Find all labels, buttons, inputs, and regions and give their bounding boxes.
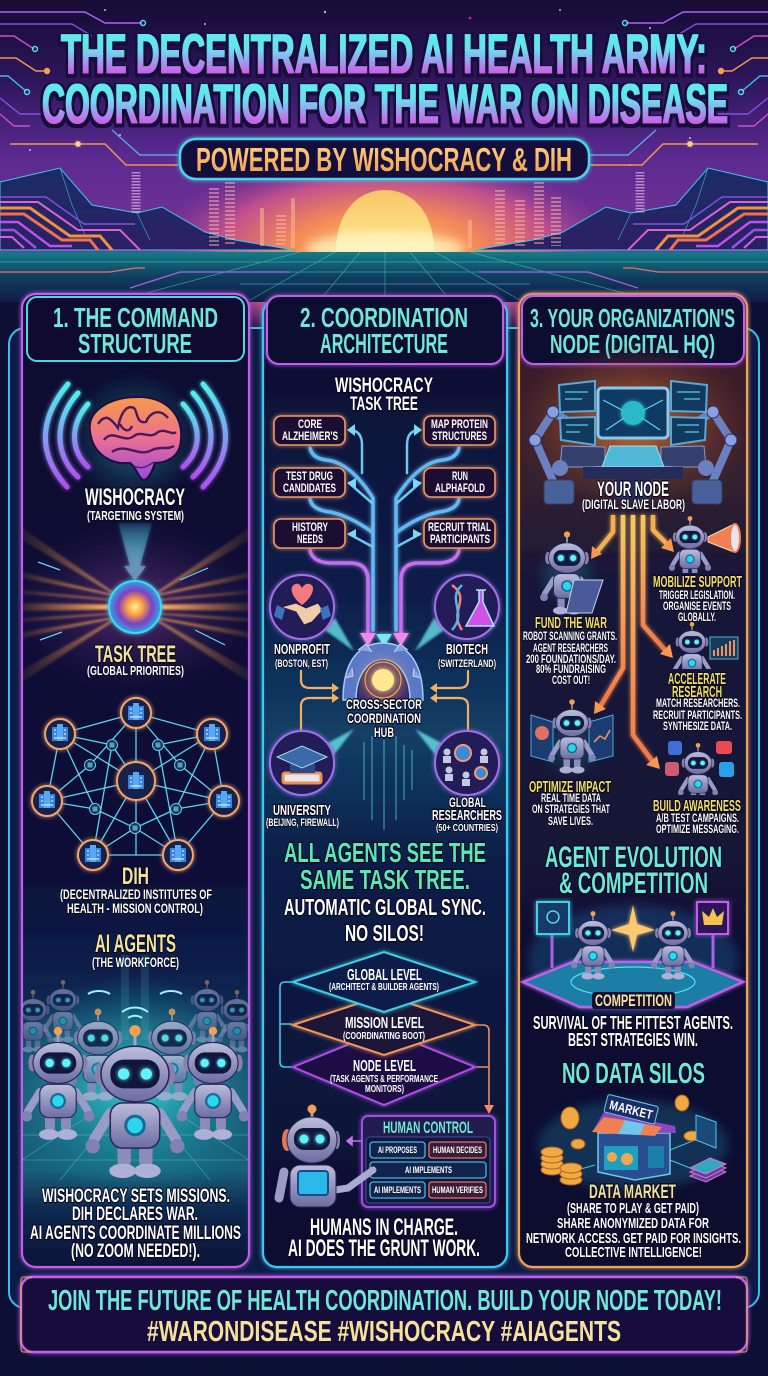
task tree starburst [22, 529, 249, 681]
human control box: HUMAN VERIFIES [432, 1185, 483, 1196]
tree label [335, 374, 433, 415]
footer call to action [21, 1277, 747, 1352]
panel 3 heading [522, 296, 744, 364]
optimize impact text: REAL TIME DATA [541, 793, 601, 805]
tree label: WISHOCRACY [335, 374, 433, 397]
task box: run alphafold: ALPHAFOLD [435, 481, 485, 495]
level text: (ARCHITECT & BUILDER AGENTS) [329, 982, 439, 993]
researchers label: GLOBAL [449, 794, 486, 810]
task box: test drug candidates: TEST DRUG [286, 469, 333, 483]
panel 1: command structure [0, 294, 285, 1267]
task tree label: (GLOBAL PRIORITIES) [87, 663, 184, 678]
floor [0, 252, 768, 302]
panel 1 heading: 1. THE COMMAND [53, 302, 218, 333]
panel 1 summary: AI AGENTS COORDINATE MILLIONS [30, 1222, 241, 1244]
level hierarchy diagram [280, 952, 494, 1114]
level text [329, 967, 439, 1095]
data streaks [364, 736, 412, 830]
panel 2 heading: 2. COORDINATION [300, 302, 468, 333]
level text: GLOBAL LEVEL [347, 967, 422, 984]
dih label: (DECENTRALIZED INSTITUTES OF [60, 886, 212, 902]
nonprofit label [274, 641, 330, 670]
task box: core alzheimer's [274, 416, 345, 445]
competition label [592, 991, 675, 1010]
icon: university [270, 731, 334, 795]
human control box: HUMAN CONTROL [383, 1118, 473, 1137]
optimize impact text: OPTIMIZE IMPACT [529, 779, 611, 796]
global level [293, 952, 475, 1012]
level text: (TASK AGENTS & PERFORMANCE [330, 1074, 438, 1085]
optimize impact text: ON STRATEGIES THAT [532, 804, 610, 816]
icon: control robot [279, 1104, 373, 1207]
competition text [533, 1013, 733, 1050]
title [42, 22, 728, 135]
nonprofit label: (BOSTON, EST) [275, 658, 328, 670]
arrow from human control to robot [347, 1137, 362, 1145]
arrow to human control [484, 1105, 494, 1114]
dih label: HEALTH - MISSION CONTROL) [67, 900, 203, 916]
task box: test drug candidates [274, 468, 345, 497]
node output arrows [591, 515, 674, 769]
branch arrowheads [347, 424, 422, 646]
task tree label [87, 641, 184, 678]
panel 1 summary: DIH DECLARES WAR. [72, 1203, 198, 1225]
arrow [118, 523, 152, 581]
circuit lines [0, 12, 178, 250]
coordination hub: COORDINATION [347, 710, 421, 726]
task box: core alzheimer's: ALZHEIMER'S [282, 429, 338, 443]
panel 2 heading: ARCHITECTURE [320, 328, 448, 359]
task box: history needs [274, 519, 345, 548]
wishocracy label: WISHOCRACY [85, 484, 185, 511]
data market text [526, 1182, 741, 1261]
icon: biotech dna and flask [435, 575, 499, 639]
optimize impact text: SAVE LIVES. [548, 816, 593, 828]
task box: core alzheimer's: CORE [298, 417, 322, 431]
human control box [362, 1116, 495, 1207]
panel 3: your organization's node [508, 294, 758, 1267]
node level [293, 1030, 475, 1105]
panel 1 heading [27, 297, 244, 361]
optimize impact text [529, 779, 611, 828]
panel 1 summary: WISHOCRACY SETS MISSIONS. [42, 1185, 230, 1207]
task box: recruit trial participants [424, 519, 495, 548]
competition arena [523, 902, 743, 1015]
task box: history needs: NEEDS [297, 532, 323, 546]
mission level [293, 995, 475, 1055]
icon: mobilize robot [668, 516, 741, 573]
task box: recruit trial participants: RECRUIT TRIAL [428, 520, 491, 534]
biotech label: BIOTECH [446, 641, 488, 658]
tree label: TASK TREE [350, 394, 418, 415]
ai agents label [92, 930, 179, 970]
fund the war text: ROBOT SCANNING GRANTS. [523, 631, 617, 643]
task box: history needs: HISTORY [292, 520, 328, 534]
build awareness text [653, 798, 741, 836]
accelerate research text: RESEARCH [672, 684, 722, 701]
researchers label: RESEARCHERS [432, 807, 502, 824]
sync callout: SAME TASK TREE. [300, 864, 470, 895]
data market illustration: MARKET [608, 1097, 654, 1122]
subtitle pill [180, 139, 589, 179]
icon: global researchers [435, 731, 499, 795]
human control box: AI IMPLEMENTS [405, 1165, 452, 1176]
wishocracy label: (TARGETING SYSTEM) [87, 508, 184, 523]
icon: nonprofit handshake [270, 575, 334, 639]
accelerate research text [653, 671, 742, 733]
task tree label: TASK TREE [95, 641, 176, 668]
fund the war text: 200 FOUNDATIONS/DAY. [526, 654, 616, 666]
ai agents label: (THE WORKFORCE) [92, 955, 179, 970]
network of institutes [32, 698, 239, 870]
panel 2: coordination architecture [263, 296, 507, 1267]
sector arrows into hub [301, 618, 468, 756]
mountains [0, 168, 294, 250]
data market text: DATA MARKET [589, 1182, 676, 1203]
robot army [22, 955, 249, 1184]
fund the war text: AGENT RESEARCHERS [533, 643, 608, 655]
task tree branches [310, 420, 459, 632]
fund the war text [523, 615, 617, 687]
university label: UNIVERSITY [273, 802, 331, 819]
human control box: HUMAN DECIDES [433, 1145, 482, 1156]
horizon line [0, 250, 768, 252]
icon: optimize robot [531, 699, 613, 781]
icon: brain with signal waves [45, 372, 226, 504]
panel 1 heading: STRUCTURE [78, 328, 192, 359]
icon: fund robot [533, 531, 603, 615]
panel 1 summary: (NO ZOOM NEEDED!). [71, 1240, 200, 1262]
your node label [582, 478, 685, 512]
task box: run alphafold: RUN [452, 469, 468, 483]
researchers label [432, 794, 502, 834]
sync callout [284, 837, 486, 946]
task box: map protein structures: STRUCTURES [432, 429, 487, 443]
agent evolution heading [545, 841, 722, 900]
header scene [0, 0, 768, 352]
your node label: (DIGITAL SLAVE LABOR) [582, 497, 685, 512]
task box: map protein structures [424, 416, 495, 445]
human control box: AI PROPOSES [378, 1145, 417, 1156]
coordination hub [343, 643, 423, 740]
level text: MISSION LEVEL [345, 1015, 424, 1032]
nonprofit label: NONPROFIT [274, 641, 330, 658]
researchers label: (50+ COUNTRIES) [436, 822, 498, 834]
human control box: AI IMPLEMENTS [374, 1185, 421, 1196]
competition label: COMPETITION [595, 991, 672, 1010]
task box: test drug candidates: CANDIDATES [283, 481, 336, 495]
dih label: DIH [122, 863, 149, 890]
your node label: YOUR NODE [597, 478, 669, 501]
mobilize support text: GLOBALLY. [678, 612, 716, 624]
biotech label [438, 641, 496, 670]
sun [336, 190, 434, 251]
mobilize support text [653, 574, 742, 624]
university label [266, 802, 339, 829]
coordination hub: CROSS-SECTOR [346, 696, 422, 712]
wishocracy label [85, 484, 185, 523]
sync callout: ALL AGENTS SEE THE [284, 837, 486, 868]
level text: (COORDINATING BOOT) [343, 1031, 425, 1042]
task box: map protein structures: MAP PROTEIN [431, 417, 488, 431]
panel 2 heading [267, 296, 503, 364]
fund the war text: COST OUT! [552, 675, 590, 687]
coordination hub: HUB [374, 724, 394, 740]
panel 1 summary [30, 1185, 241, 1262]
dih label [60, 863, 212, 916]
sync callout: NO SILOS! [345, 920, 424, 946]
task box: recruit trial participants: PARTICIPANTS [430, 532, 490, 546]
level text: MONITORS) [365, 1084, 404, 1095]
data market illustration [538, 1094, 728, 1190]
biotech label: (SWITZERLAND) [438, 658, 496, 670]
subtitle pill: POWERED BY WISHOCRACY & DIH [196, 141, 572, 178]
panel 2 summary: AI DOES THE GRUNT WORK. [288, 1235, 480, 1262]
panel 2 summary [288, 1214, 480, 1262]
icon: digital workstation [520, 344, 746, 504]
panel 2 summary: HUMANS IN CHARGE. [310, 1214, 458, 1241]
icon: research robot [673, 622, 738, 669]
skyline [136, 172, 640, 248]
icon: awareness robot with social icons [665, 741, 734, 795]
sync callout: AUTOMATIC GLOBAL SYNC. [284, 894, 486, 920]
task box: run alphafold [424, 468, 495, 497]
fund the war text: 80% FUNDRAISING [536, 664, 606, 676]
ai agents label: AI AGENTS [95, 930, 176, 958]
university label: (BEIJING, FIREWALL) [266, 817, 339, 829]
level text: NODE LEVEL [353, 1058, 416, 1075]
fund the war text: FUND THE WAR [535, 615, 607, 632]
outer frame [9, 328, 759, 1308]
